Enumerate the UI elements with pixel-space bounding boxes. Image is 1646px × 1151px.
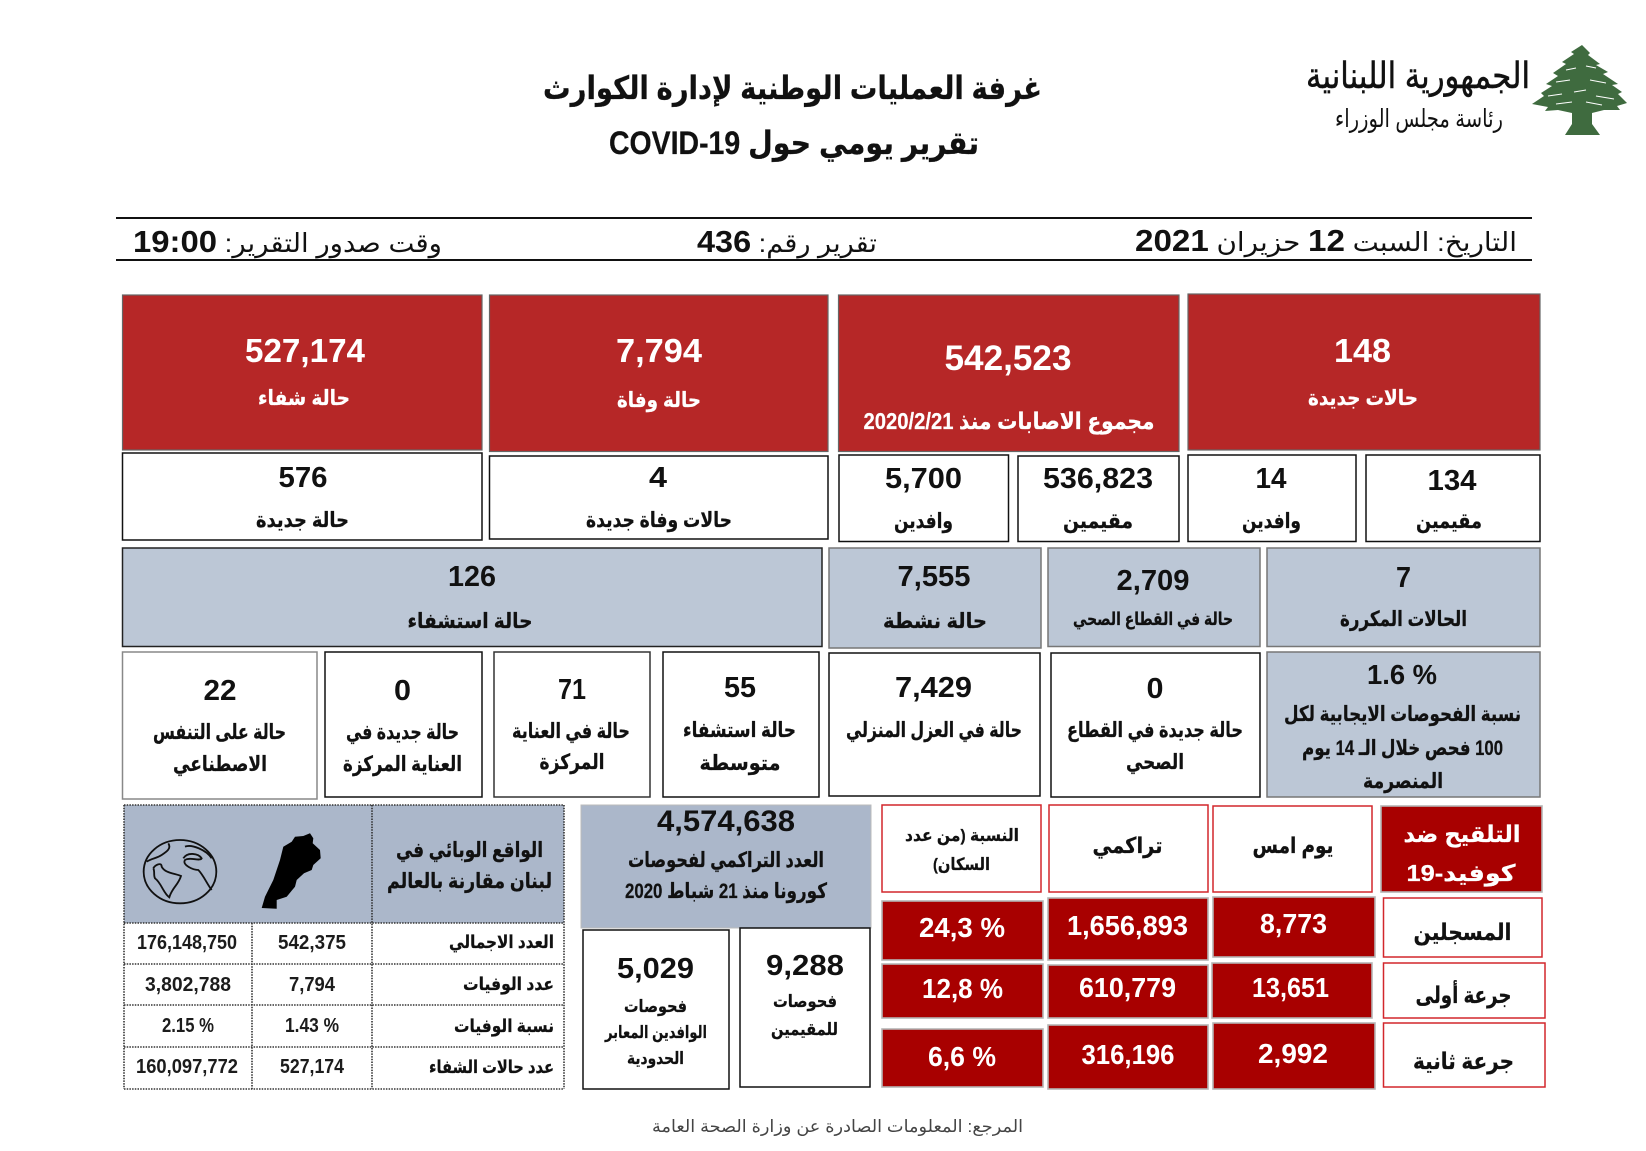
panel: total arrivals: 5,700 (885, 463, 962, 495)
panel: new residents: 134 (1428, 465, 1476, 497)
panel: arrivals tests: 5,029 (617, 953, 694, 985)
panel: new recoveries (122, 453, 482, 540)
panel: total cases (838, 295, 1179, 452)
panel: new arrivals: 14 (1256, 463, 1286, 495)
panel: total residents: مقيمين (1063, 510, 1133, 533)
panel: health sector cases: حالة في القطاع الصحي (1073, 609, 1233, 630)
footer source note: المرجع: المعلومات الصادرة عن وزارة الصحة العامة (652, 1117, 1023, 1137)
logo: Lebanese Republic calligraphy: الجمهورية اللبنانية (1306, 55, 1530, 97)
icon: Lebanon map (262, 833, 321, 909)
title: تقرير يومي حول COVID-19 (609, 125, 979, 162)
vaccination header: cumulative (1049, 805, 1208, 892)
row: fatality rate: 2.15 % (162, 1015, 214, 1037)
report info bar (116, 218, 1532, 260)
vaccination header: population share: السكان) (933, 855, 990, 874)
icon: cedar tree (1532, 45, 1627, 135)
panel: recoveries: 527,174 (245, 332, 366, 369)
row: deaths: 7,794 (289, 974, 336, 996)
panel: new ICU cases (325, 652, 482, 797)
panel: resident tests (740, 928, 870, 1087)
panel: new ICU cases: 0 (394, 675, 411, 707)
panel: new ICU cases: حالة جديدة في (346, 721, 459, 744)
vaccination title (1381, 806, 1542, 892)
panel: new health sector cases: حالة جديدة في القطاع (1067, 719, 1243, 742)
vaccination row: first dose: جرعة أولى (1416, 979, 1512, 1009)
vaccination row: first dose: 13,651 (1252, 972, 1329, 1003)
panel: cumulative tests: كورونا منذ 21 شباط 2020 (625, 880, 828, 903)
logo: Lebanese Republic calligraphy: رئاسة مجلس الوزراء (1335, 105, 1503, 133)
panel: health sector cases: 2,709 (1116, 565, 1190, 597)
panel: new cases: حالات جديدة (1308, 387, 1418, 410)
vaccination header: yesterday (1213, 806, 1372, 892)
panel: ventilator cases (122, 652, 317, 799)
vaccination row: second dose: 2,992 (1258, 1038, 1328, 1069)
row: total: 176,148,750 (137, 932, 237, 954)
panel: positivity rate: نسبة الفحوصات الايجابية لكل (1284, 703, 1521, 726)
panel: repeated cases: الحالات المكررة (1340, 608, 1467, 631)
icon: globe (144, 840, 216, 903)
row: fatality rate: نسبة الوفيات (454, 1016, 554, 1037)
panel: Lebanon vs world table (124, 805, 564, 1089)
panel: total arrivals: وافدين (894, 510, 953, 533)
vaccination header: yesterday: يوم امس (1252, 833, 1334, 859)
panel: moderate hospital cases: حالة استشفاء (683, 719, 796, 742)
panel: new arrivals (1188, 455, 1356, 542)
panel: new arrivals: وافدين (1242, 510, 1301, 533)
vaccination row: registered: 1,656,893 (1067, 910, 1188, 941)
panel: total residents: 536,823 (1043, 463, 1153, 495)
vaccination header: population share (882, 805, 1041, 892)
panel: ICU cases: المركزة (540, 751, 604, 774)
panel: active cases: حالة نشطة (883, 610, 987, 633)
panel: resident tests: 9,288 (766, 950, 844, 982)
panel: new deaths: 4 (649, 462, 667, 494)
panel: new ICU cases: العناية المركزة (343, 753, 462, 776)
vaccination title: كوفيد-19 (1406, 860, 1516, 887)
panel: new health sector cases (1051, 653, 1260, 797)
row: recoveries: عدد حالات الشفاء (429, 1057, 554, 1077)
panel: positivity rate (1267, 652, 1540, 797)
panel: new recoveries: 576 (278, 462, 328, 494)
title (543, 70, 1042, 162)
panel: ICU cases: 71 (558, 674, 586, 706)
report info bar: وقت صدور التقرير: 19:00 (133, 224, 442, 259)
panel: new deaths: حالات وفاة جديدة (586, 509, 732, 532)
panel: cumulative tests (581, 805, 871, 928)
panel: ventilator cases: الاصطناعي (173, 753, 267, 776)
panel: positivity rate: 1.6 % (1367, 659, 1437, 690)
panel: arrivals tests: فحوصات (624, 997, 687, 1017)
vaccination row: second dose: جرعة ثانية (1413, 1048, 1514, 1075)
panel: ventilator cases: 22 (204, 675, 236, 707)
panel: deaths: 7,794 (616, 332, 703, 369)
vaccination row: second dose: 6,6 % (928, 1041, 996, 1072)
report info bar: التاريخ: السبت 12 حزيران 2021 (1135, 223, 1517, 258)
panel: arrivals tests: الحدودية (627, 1049, 684, 1069)
vaccination row: first dose (882, 963, 1545, 1018)
table heading (387, 839, 552, 893)
panel: positivity rate: 100 فحص خلال الـ 14 يوم (1302, 737, 1503, 760)
panel: resident tests: فحوصات (773, 992, 837, 1012)
panel: total arrivals (839, 455, 1008, 542)
panel: ventilator cases: حالة على التنفس (153, 721, 286, 744)
panel: arrivals tests (583, 930, 729, 1089)
panel: home isolation (829, 653, 1040, 796)
panel: moderate hospital cases: 55 (724, 672, 756, 704)
row: fatality rate: 1.43 % (285, 1015, 339, 1037)
row: total: 542,375 (278, 932, 346, 954)
report info bar: تقرير رقم: 436 (697, 224, 877, 259)
panel: new deaths (490, 456, 828, 539)
panel: recoveries (122, 295, 482, 450)
panel: recoveries: حالة شفاء (258, 387, 350, 410)
panel: home isolation: حالة في العزل المنزلي (846, 719, 1022, 742)
panel: health sector cases (1048, 548, 1260, 646)
row: recoveries: 160,097,772 (136, 1056, 238, 1078)
vaccination row: second dose (882, 1023, 1545, 1089)
row: deaths: 3,802,788 (145, 974, 231, 996)
row: recoveries: 527,174 (280, 1056, 345, 1078)
panel: new residents: مقيمين (1416, 510, 1482, 533)
panel: total residents (1018, 456, 1179, 542)
row: total: العدد الاجمالي (449, 932, 554, 953)
panel: hospitalised: 126 (448, 561, 496, 593)
panel: repeated cases (1267, 548, 1540, 646)
panel: new cases: 148 (1334, 332, 1391, 369)
vaccination row: registered: 24,3 % (919, 912, 1005, 943)
panel: hospitalised (122, 548, 822, 646)
panel: new cases (1188, 294, 1540, 450)
panel: deaths (490, 295, 828, 452)
vaccination row: first dose: 610,779 (1079, 972, 1176, 1003)
vaccination row: registered: المسجلين (1414, 919, 1512, 946)
panel: total cases: 542,523 (944, 339, 1072, 378)
panel: deaths: حالة وفاة (617, 389, 701, 412)
panel: ICU cases: حالة في العناية (512, 720, 630, 743)
panel: arrivals tests: الوافدين المعابر (604, 1023, 707, 1043)
panel: new health sector cases: الصحي (1126, 751, 1184, 774)
row: deaths (145, 974, 554, 996)
vaccination header: cumulative: تراكمي (1092, 833, 1162, 859)
table heading: الواقع الوبائي في (396, 839, 543, 862)
panel: home isolation: 7,429 (895, 672, 972, 704)
row: recoveries (136, 1056, 554, 1078)
panel: total cases: مجموع الاصابات منذ 2020/2/21 (864, 408, 1154, 435)
vaccination row: registered (882, 897, 1542, 960)
title: غرفة العمليات الوطنية لإدارة الكوارث (543, 70, 1042, 107)
panel: new recoveries: حالة جديدة (256, 509, 349, 532)
table heading: لبنان مقارنة بالعالم (387, 870, 552, 893)
panel: moderate hospital cases (663, 652, 819, 797)
panel: ICU cases (494, 652, 650, 797)
panel: new health sector cases: 0 (1146, 673, 1164, 705)
vaccination title: التلقيح ضد (1404, 821, 1520, 848)
vaccination header: population share: النسبة (من عدد (905, 826, 1019, 846)
panel: moderate hospital cases: متوسطة (700, 752, 780, 775)
row: total (137, 932, 554, 954)
panel: hospitalised: حالة استشفاء (408, 610, 532, 633)
vaccination row: first dose: 12,8 % (922, 973, 1003, 1004)
panel: repeated cases: 7 (1396, 562, 1411, 594)
panel: resident tests: للمقيمين (771, 1020, 838, 1040)
panel: active cases (829, 548, 1041, 648)
vaccination row: second dose: 316,196 (1082, 1039, 1174, 1070)
row: fatality rate (162, 1015, 554, 1037)
vaccination row: registered: 8,773 (1260, 908, 1327, 939)
panel: positivity rate: المنصرمة (1363, 770, 1443, 793)
panel: active cases: 7,555 (898, 561, 970, 593)
panel: cumulative tests: العدد التراكمي لفحوصات (628, 849, 824, 872)
panel: cumulative tests: 4,574,638 (657, 805, 795, 838)
row: deaths: عدد الوفيات (463, 974, 554, 995)
panel: new residents (1366, 455, 1540, 542)
logo: Lebanese Republic calligraphy (1306, 55, 1530, 133)
